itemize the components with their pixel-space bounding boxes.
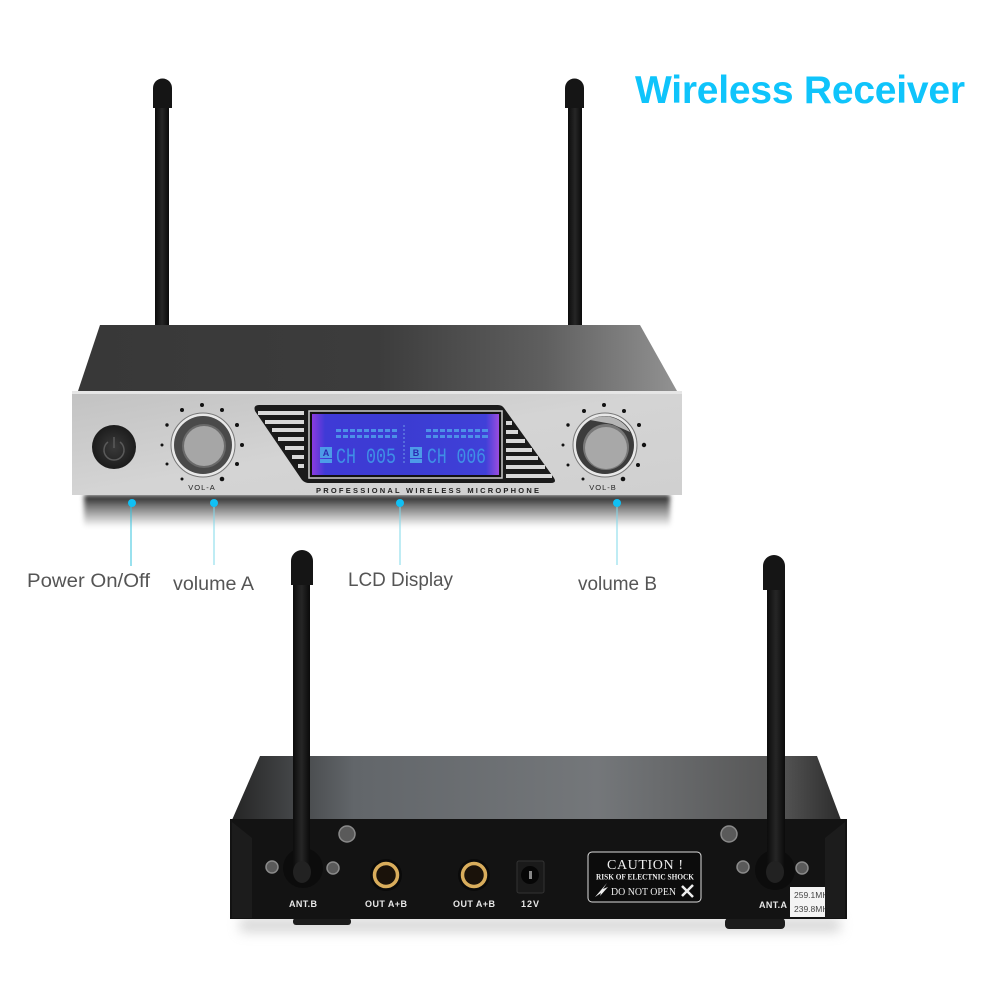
volume B label: VOL-B (589, 483, 617, 492)
rear unit top cover (232, 756, 841, 820)
title: Wireless Receiver (635, 69, 965, 112)
callout: volume B: volume B (578, 574, 657, 595)
channel A readout: A (323, 448, 330, 458)
volume A knob (160, 403, 244, 481)
rear feet (293, 918, 785, 929)
channel B readout: B (413, 448, 420, 458)
callout: power on/off (27, 499, 151, 592)
rear labels: OUT A+B (365, 899, 408, 909)
front panel (72, 391, 682, 495)
rear labels: ANT.A (759, 900, 788, 910)
rear left antenna (283, 550, 323, 888)
callout: power on/off: Power On/Off (27, 571, 151, 592)
channel A readout: CH 005 (336, 445, 396, 470)
panel caption: PROFESSIONAL WIRELESS MICROPHONE (316, 486, 539, 495)
frequency sticker: 259.1MHz (794, 890, 833, 900)
front right antenna (565, 78, 584, 328)
callout: LCD display: LCD Display (348, 570, 453, 591)
volume B knob (562, 403, 646, 481)
front left antenna (153, 78, 172, 328)
callout: LCD display (348, 499, 453, 591)
rear panel (230, 819, 847, 919)
caution label: RISK OF ELECTNIC SHOCK (596, 872, 695, 882)
callout: volume A: volume A (173, 574, 254, 595)
rear unit shadow (240, 918, 840, 932)
rear labels: 12V (521, 899, 539, 909)
frequency sticker: 239.8MHz (794, 904, 833, 914)
callout: volume B (578, 499, 657, 595)
power button (92, 425, 136, 469)
channel A readout (320, 445, 396, 470)
front view of receiver (72, 78, 682, 527)
LCD screen (309, 411, 502, 478)
caution label: DO NOT OPEN (611, 887, 676, 898)
LCD divider (403, 425, 405, 463)
frequency sticker (790, 887, 833, 917)
output jack 1 (370, 859, 402, 891)
output jack 2 (458, 859, 490, 891)
LCD level meters (336, 429, 488, 438)
caution label (588, 852, 701, 902)
channel B readout: CH 006 (427, 445, 486, 470)
12V power socket (517, 861, 544, 893)
front unit top cover (78, 325, 677, 391)
display bezel with stripes (254, 405, 555, 483)
rear labels (289, 899, 788, 910)
volume A label: VOL-A (188, 483, 216, 492)
rear labels: OUT A+B (453, 899, 496, 909)
channel B readout (410, 445, 486, 470)
rear right antenna (755, 555, 795, 890)
front unit shadow (84, 495, 670, 527)
rear screws (266, 826, 808, 874)
rear labels: ANT.B (289, 899, 318, 909)
rear view of receiver (230, 550, 847, 932)
caution label: CAUTION ! (607, 858, 683, 873)
callout: volume A (173, 499, 254, 595)
